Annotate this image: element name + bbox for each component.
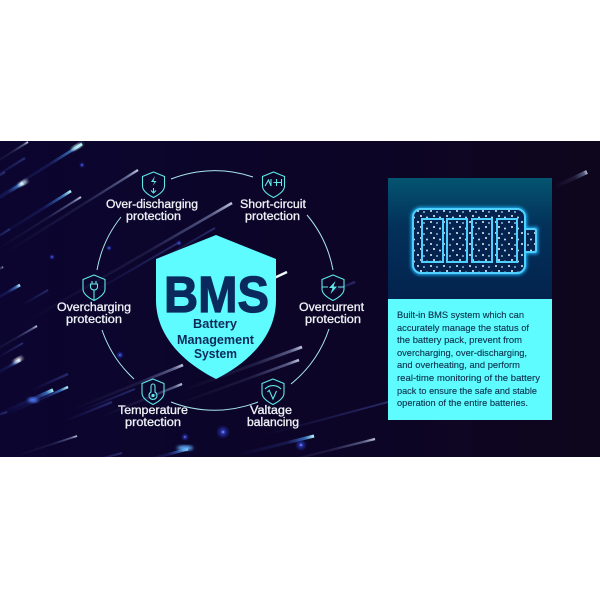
label: overcharging: protection: [66, 314, 122, 326]
label: voltage balancing: [247, 405, 299, 429]
label: short-circuit: [240, 199, 307, 223]
text block: description: [397, 310, 540, 409]
label: temperature: [118, 405, 188, 429]
icon: glowing battery: [413, 209, 536, 273]
text block: description: accurately manage the status of: [397, 323, 529, 334]
label: short-circuit: Short-circuit: [240, 199, 307, 211]
label: overcurrent: protection: [305, 314, 361, 326]
icon: overcharging shield: [83, 275, 105, 300]
panel: description text: [388, 299, 552, 420]
icon: temperature shield: [142, 379, 164, 404]
shield subtitle: Management: [177, 332, 255, 347]
icon: voltage balancing shield: [262, 379, 284, 404]
label: voltage balancing: Valtage: [250, 405, 292, 417]
label: temperature: protection: [125, 417, 181, 429]
BMS heading: BMS: [164, 266, 269, 323]
icon: short-circuit shield: [262, 172, 284, 198]
shield subtitle: Battery: [193, 316, 238, 331]
text block: description: pack to ensure the safe and stable: [397, 386, 537, 397]
shield subtitle: [177, 316, 255, 361]
icon: overcurrent shield: [322, 275, 344, 300]
light streaks background: [0, 141, 588, 469]
label: over-discharging: protection: [126, 211, 181, 223]
label: overcharging: Overcharging: [57, 302, 131, 314]
label: overcharging: [57, 302, 131, 326]
label: over-discharging: Over-discharging: [106, 199, 198, 211]
label: temperature: Temperature: [118, 405, 188, 417]
background band: [0, 141, 600, 457]
icon: over-discharging shield: [142, 172, 164, 198]
shield subtitle: System: [194, 346, 237, 361]
panel: battery image: [388, 178, 552, 299]
text block: description: Built-in BMS system which can: [397, 310, 524, 321]
text block: description: overcharging, over-discharging,: [397, 348, 527, 359]
label: overcurrent: [299, 302, 365, 326]
text block: description: and overheating, and perform: [397, 360, 520, 371]
label: short-circuit: protection: [245, 211, 300, 223]
connecting ring arcs: [97, 171, 333, 410]
text block: description: real-time monitoring of the battery: [397, 373, 540, 384]
text block: description: the battery pack, prevent from: [397, 335, 522, 346]
label: voltage balancing: balancing: [247, 417, 299, 429]
text block: description: operation of the entire batteries.: [397, 398, 528, 409]
label: over-discharging: [106, 199, 198, 223]
label: overcurrent: Overcurrent: [299, 302, 365, 314]
central BMS shield: [156, 235, 276, 379]
